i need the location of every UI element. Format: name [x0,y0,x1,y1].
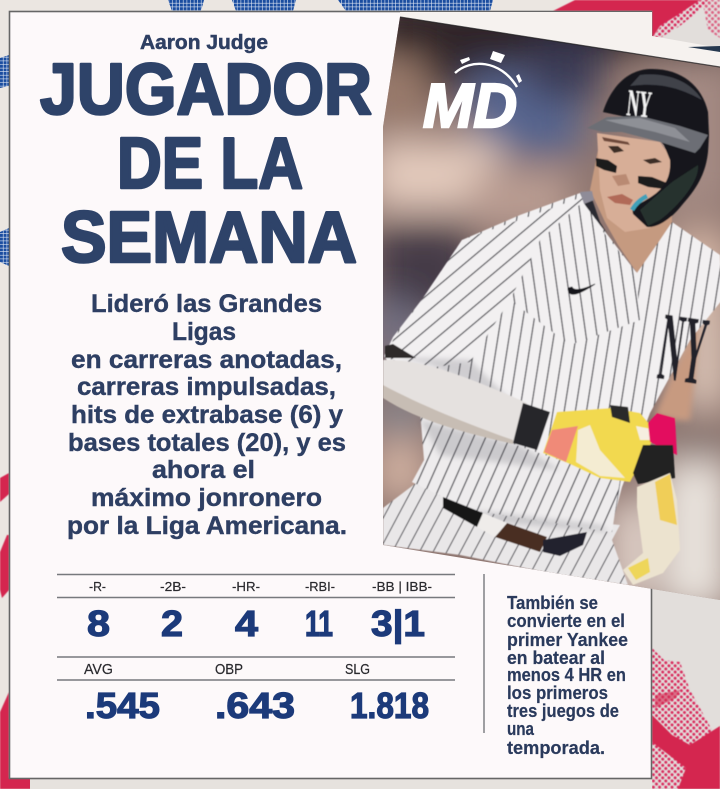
stat values row 1: 3|1 [371,603,425,645]
logo: MD stopwatch: MD [423,72,517,141]
jersey shadow folds [395,357,610,532]
dark wedge at top right [688,46,720,52]
stat labels row 1: -2B- [160,579,186,594]
stat values row 1: 2 [161,603,183,644]
name: Aaron Judge: Aaron Judge [140,32,268,54]
side note: primer Yankee [507,630,628,650]
title: Jugador de la semana: SEMANA [61,198,357,278]
left red strokes [0,473,38,789]
text block: achievements: bases totales (20), y es [68,429,346,457]
photo: Aaron Judge [370,0,720,610]
batting helmet [587,69,709,227]
icon: Nike swoosh [568,284,595,294]
stat labels row 1: -R- [89,579,106,594]
photo edge line [400,17,720,67]
stat labels row 1: -BB | IBB- [372,579,432,594]
arm sleeve [383,360,527,443]
stat labels row 1 [89,579,432,594]
table rules [57,574,455,680]
top blue strokes [0,0,493,266]
text block: achievements: Ligas [172,318,236,346]
nose shadow [612,174,630,186]
stat labels row 2: SLG [345,662,370,678]
top red stroke [553,0,720,38]
side note: los primeros [507,683,608,703]
text block: achievements: máximo jonronero [91,484,322,512]
photo background: blurred stadium [370,0,720,610]
right forearm [655,320,700,420]
stat labels row 2: AVG [84,662,113,678]
text block: achievements [67,290,347,540]
stat values row 1 [87,603,425,645]
teal guard edge [632,196,647,210]
helmet brim [587,116,708,153]
stat labels row 1: -HR- [232,579,260,594]
lips [607,194,633,205]
side note: en batear al [507,648,605,668]
stat values row 1: 11 [305,603,333,644]
stat values row 2: 1.818 [350,685,429,726]
white paper strip behind the photo [400,12,720,68]
side note: menos 4 HR en [507,665,626,685]
batting helmet: NY [625,82,653,126]
stat labels row 2: OBP [215,662,243,678]
jersey [384,193,720,532]
stat values row 2: .643 [215,685,295,726]
belt [443,497,587,556]
pink and black wristbands [633,413,677,484]
stat values row 1: 8 [87,603,110,644]
stats table [57,574,455,726]
side note [507,593,628,758]
stat values row 2 [85,685,429,726]
side note: temporada. [507,738,605,758]
stat labels row 1: -RBI- [305,579,335,594]
player figure [383,69,720,585]
title: Jugador de la semana: JUGADOR [40,50,372,130]
text block: achievements: hits de extrabase (6) y [71,401,343,429]
stat labels row 2 [84,662,370,678]
sleeve opening shadow [385,344,416,358]
stat values row 2: .545 [85,685,160,726]
text block: achievements: carreras impulsadas, [77,373,336,401]
text block: achievements: por la Liga Americana. [67,512,347,540]
neck and face [580,133,672,273]
stat values row 1: 4 [235,603,258,644]
right red halftone [652,648,720,789]
title: Jugador de la semana: DE LA [117,124,303,204]
eyes [608,146,624,153]
side note: una [507,719,535,739]
text block: achievements: Lideró las Grandes [91,290,322,318]
wristband [513,403,550,450]
left hand glove [623,473,680,585]
side note: convierte en el [507,611,625,631]
side note: También se [507,593,598,613]
title: Jugador de la semana [40,50,372,278]
eye black [596,158,617,173]
divider [483,574,485,733]
side note: tres juegos de [507,701,619,721]
pants [383,480,628,585]
text block: achievements: en carreras anotadas, [71,346,342,374]
text block: achievements: ahora el [152,456,255,484]
glove on right hand [543,405,657,482]
